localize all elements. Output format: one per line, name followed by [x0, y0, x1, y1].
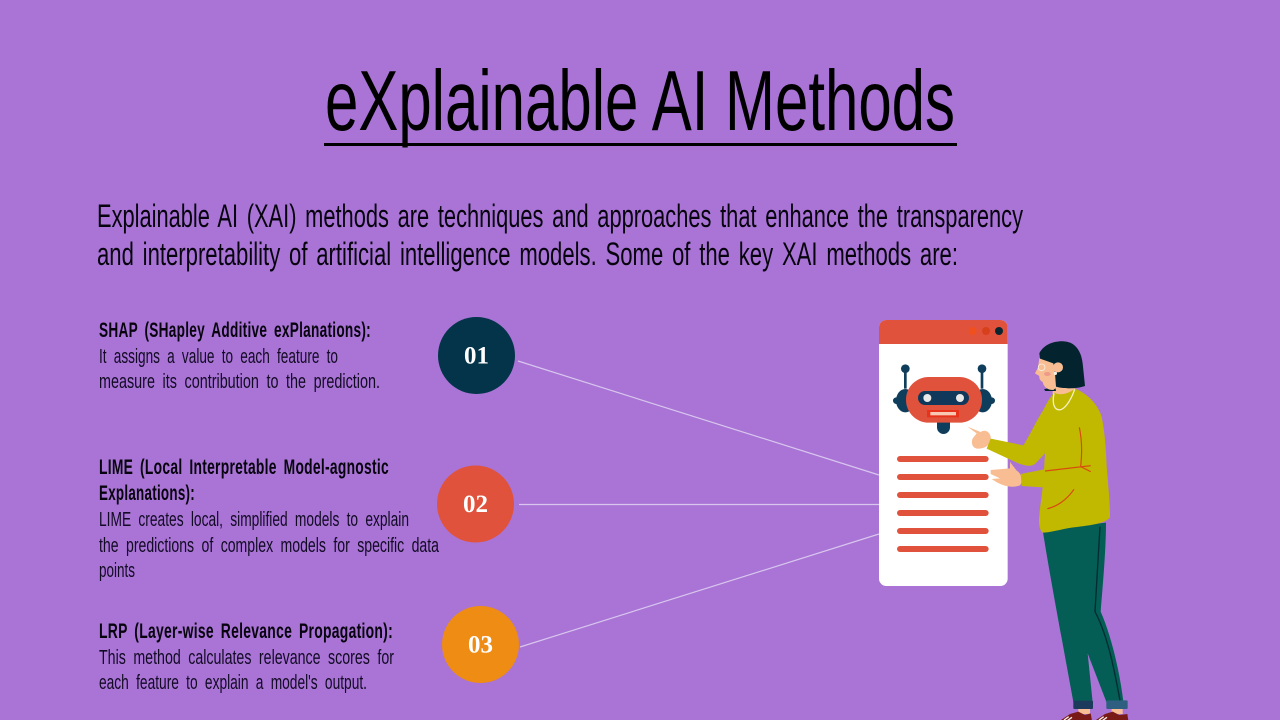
text block: SHAP: measure its contribution to the prediction.	[99, 371, 380, 393]
text block: LRP	[99, 620, 394, 694]
number badge 01	[438, 317, 515, 394]
number badge 02: 02	[463, 491, 488, 518]
text block: LIME: points	[99, 560, 135, 582]
text block: LRP: LRP (Layer-wise Relevance Propagation):	[99, 620, 393, 643]
text block: LIME: Explanations):	[99, 482, 195, 505]
text block: LIME: LIME creates local, simplified models to explain	[99, 509, 409, 531]
text lines in window	[897, 456, 989, 552]
text block: LRP: This method calculates relevance scores for	[99, 647, 394, 669]
text block: SHAP: SHAP (SHapley Additive exPlanations):	[99, 319, 371, 342]
app window panel	[879, 320, 1008, 586]
number badge 03	[442, 606, 519, 683]
connector lines	[518, 361, 879, 647]
text block: LIME: LIME (Local Interpretable Model-agnostic	[99, 456, 389, 479]
title: eXplainable AI Methods	[325, 54, 955, 149]
presenter figure	[967, 341, 1128, 720]
number badge 03: 03	[468, 632, 493, 658]
text block: LRP: each feature to explain a model's output.	[99, 672, 367, 694]
text block: LIME: the predictions of complex models for specific data	[99, 535, 440, 557]
icon: robot	[893, 364, 995, 434]
text block: SHAP	[99, 319, 380, 393]
number badge 02	[437, 466, 514, 542]
text block: SHAP: It assigns a value to each feature to	[99, 346, 338, 368]
illustration: app window and presenter	[879, 320, 1128, 720]
text block: LIME	[99, 456, 440, 582]
number badge 01: 01	[464, 342, 489, 370]
intro paragraph	[97, 198, 1023, 272]
